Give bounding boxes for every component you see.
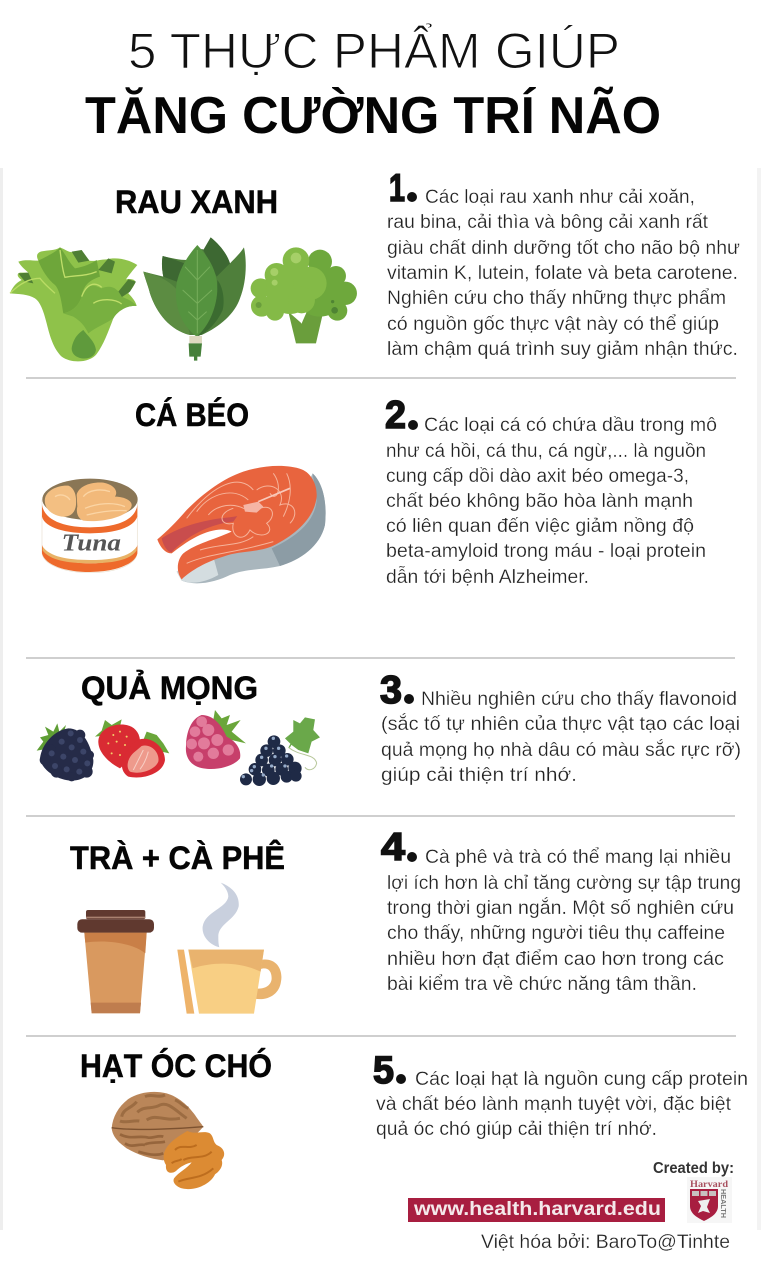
number 5	[373, 1049, 406, 1092]
icon: harvard health logo	[687, 1177, 732, 1223]
number 2: 2	[385, 394, 406, 437]
text block 2: dẫn tới bệnh Alzheimer.	[386, 566, 589, 588]
icon: raspberry	[186, 710, 246, 769]
icon: blackberry	[37, 723, 94, 781]
icon: broccoli	[251, 247, 357, 343]
text block 5: và chất béo lành mạnh tuyệt vời, đặc biệt	[376, 1094, 732, 1115]
text block 2: chất béo không bão hòa lành mạnh	[386, 491, 693, 512]
text block 3	[381, 689, 741, 786]
number 1: 1	[389, 167, 405, 210]
text block 1: rau bina, cải thìa và bông cải xanh rất	[387, 212, 709, 233]
text block 1: có nguồn gốc thực vật này có thể giúp	[387, 314, 719, 335]
icon: takeaway coffee cup	[77, 910, 154, 1013]
icon: tea cup	[177, 950, 281, 1014]
text block 4: bài kiểm tra về chức năng tâm thần.	[387, 974, 697, 995]
text block 2: Các loại cá có chứa dầu trong mô	[424, 415, 717, 436]
text block 4: nhiều hơn đạt điểm cao hơn trong các	[387, 949, 724, 970]
text block 4	[387, 847, 741, 995]
text block 2: như cá hồi, cá thu, cá ngừ,... là nguồn	[386, 441, 706, 462]
panel: cá béo	[42, 394, 717, 588]
text block 5	[376, 1069, 748, 1140]
text block 1: vitamin K, lutein, folate và beta carotene.	[387, 263, 738, 284]
icon: tuna can: Tuna	[62, 531, 121, 557]
credit: translator: Việt hóa bởi: BaroTo@Tinhte	[481, 1232, 730, 1253]
text block 4: Cà phê và trà có thể mang lại nhiều	[425, 847, 731, 868]
icon: tuna can	[42, 479, 138, 573]
text block 2: cung cấp dồi dào axit béo omega-3,	[386, 466, 689, 487]
text block 3: (sắc tố tự nhiên của thực vật tạo các loại	[381, 713, 740, 735]
text block 2	[386, 415, 717, 588]
panel: trà + cà phê	[70, 826, 741, 1014]
text block 4: trong thời gian ngắn. Một số nghiên cứu	[387, 897, 734, 919]
icon: strawberries	[95, 719, 169, 778]
heading: rau xanh: RAU XANH	[115, 184, 278, 220]
credit: website banner: www.health.harvard.edu	[413, 1199, 661, 1220]
text block 3: Nhiều nghiên cứu cho thấy flavonoid	[421, 689, 737, 710]
heading: trà + cà phê: TRÀ + CÀ PHÊ	[70, 840, 285, 876]
number 4: 4	[381, 826, 405, 869]
text block 2: beta-amyloid trong máu - loại protein	[386, 541, 706, 562]
title: TĂNG CƯỜNG TRÍ NÃO	[85, 86, 661, 145]
text block 3: giúp cải thiện trí nhớ.	[381, 765, 577, 786]
text block 1: giàu chất dinh dưỡng tốt cho não bộ như	[387, 238, 740, 259]
text block 5: Các loại hạt là nguồn cung cấp protein	[415, 1069, 748, 1090]
text block 4: cho thấy, những người tiêu thụ caffeine	[387, 923, 725, 944]
heading: cá béo: CÁ BÉO	[135, 397, 249, 433]
heading: quả mọng: QUẢ MỌNG	[81, 670, 258, 706]
icon: salmon steak	[157, 466, 326, 583]
number 2	[385, 394, 418, 437]
title	[85, 23, 661, 145]
icon: spinach	[143, 237, 246, 361]
number 3: 3	[380, 669, 402, 712]
text block 1	[387, 187, 740, 360]
text block 4: lợi ích hơn là chỉ tăng cường sự tập trung	[387, 873, 741, 894]
panel: hạt óc chó	[80, 1048, 748, 1189]
text block 1: Nghiên cứu cho thấy những thực phẩm	[387, 288, 726, 309]
text block 2: có liên quan đến việc giảm nồng độ	[386, 516, 694, 537]
icon: lettuce	[10, 247, 137, 361]
number 5: 5	[373, 1049, 394, 1092]
text block 3: quả mọng họ nhà dâu có màu sắc rực rỡ)	[381, 739, 741, 761]
credit: created by: Created by:	[653, 1160, 734, 1177]
heading: hạt óc chó: HẠT ÓC CHÓ	[80, 1048, 272, 1084]
number 4	[381, 826, 417, 869]
icon: grapes	[240, 717, 320, 786]
icon: harvard health logo: HEALTH	[719, 1189, 726, 1218]
number 3	[380, 669, 414, 712]
icon: harvard health logo: Harvard	[690, 1179, 728, 1189]
icon: walnut	[112, 1092, 224, 1189]
text block 1: Các loại rau xanh như cải xoăn,	[425, 187, 695, 208]
text block 1: làm chậm quá trình suy giảm nhận thức.	[387, 339, 738, 360]
panel: rau xanh	[10, 167, 740, 361]
icon: steam	[203, 883, 239, 947]
panel: quả mọng	[37, 669, 741, 786]
title: 5 THỰC PHẨM GIÚP	[128, 23, 620, 79]
text block 5: quả óc chó giúp cải thiện trí nhớ.	[376, 1119, 657, 1140]
